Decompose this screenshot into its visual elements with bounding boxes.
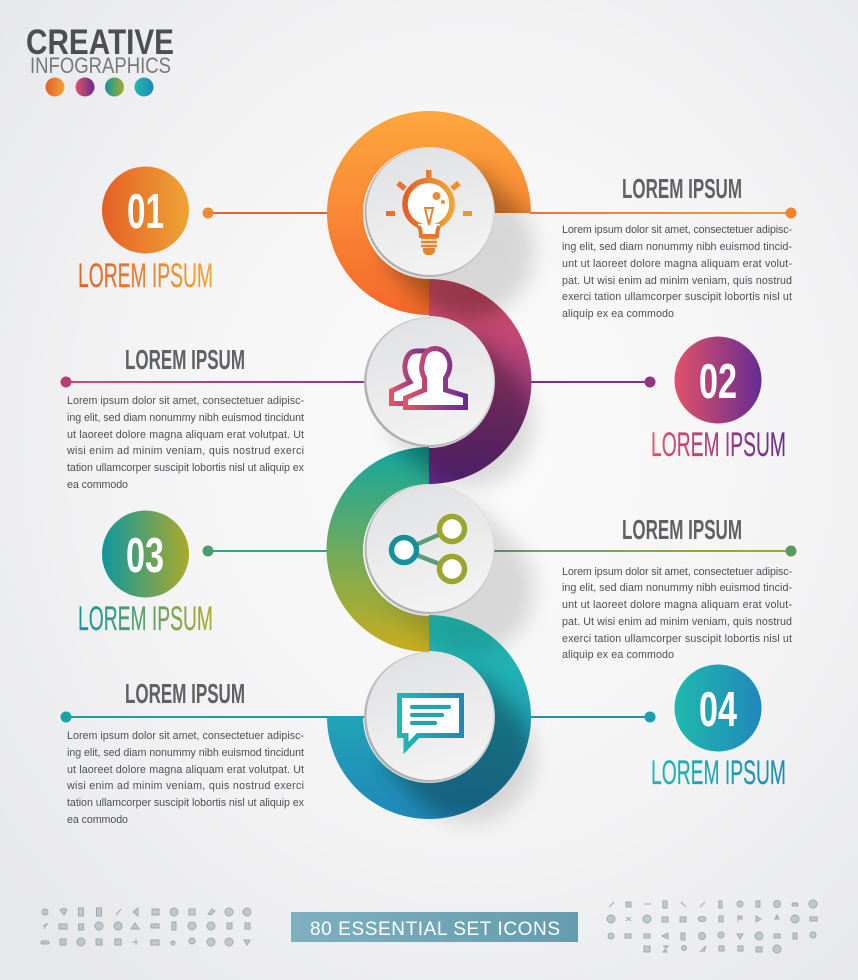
step 4 disc with chat icon — [364, 652, 494, 782]
icon set left — [41, 908, 251, 946]
number badge 03: 03 — [126, 529, 164, 583]
body 4: ea commodo — [67, 814, 128, 826]
body 1: Lorem ipsum dolor sit amet, consectetuer adipisc- — [562, 224, 792, 236]
number badge 02: 02 — [699, 355, 737, 409]
ribbon segment 1 orange — [327, 111, 531, 315]
text block 4 — [66, 678, 305, 826]
body 2: ut laoreet dolore magna aliquam erat volutpat. Ut — [67, 429, 304, 441]
body 1: pat. Ut wisi enim ad minim veniam, quis nostrud — [562, 275, 792, 287]
label 01: LOREM IPSUM — [78, 257, 213, 295]
ribbon segment 2 magenta — [429, 279, 531, 484]
body 4 — [66, 730, 305, 826]
body 2: ing elit, sed diam nonummy nibh euismod tincidunt — [67, 412, 304, 424]
heading 1: LOREM IPSUM — [622, 173, 742, 204]
body 2: Lorem ipsum dolor sit amet, consectetuer adipisc- — [67, 395, 304, 407]
logo subtitle: INFOGRAPHICS — [30, 53, 171, 78]
number badge 02 — [674, 336, 762, 424]
body 3: Lorem ipsum dolor sit amet, consectetuer adipisc- — [562, 566, 792, 578]
body 3 — [562, 566, 792, 661]
ribbon segment 4 teal — [327, 615, 531, 819]
body 4: ing elit, sed diam nonummy nibh euismod tincidunt — [67, 747, 304, 759]
body 4: wisi enim ad minim veniam, quis nostrud exerci — [66, 780, 304, 792]
body 2: tation ullamcorper suscipit lobortis nisl ut aliquip ex — [67, 462, 305, 474]
body 3: pat. Ut wisi enim ad minim veniam, quis nostrud — [562, 616, 792, 628]
body 1: aliquip ex ea commodo — [562, 308, 674, 320]
long shadows on background — [383, 166, 534, 822]
body 3: aliquip ex ea commodo — [562, 649, 674, 661]
body 1: ing elit, sed diam nonummy nibh euismod tincid- — [562, 241, 792, 253]
body 2: ea commodo — [67, 479, 128, 491]
body 3: ing elit, sed diam nonummy nibh euismod tincid- — [562, 582, 792, 594]
heading 3: LOREM IPSUM — [622, 514, 742, 545]
number badge 01: 01 — [127, 185, 164, 239]
body 4: Lorem ipsum dolor sit amet, consectetuer adipisc- — [67, 730, 304, 742]
body 1: exerci tation ullamcorper suscipit lobortis nisl ut — [562, 291, 792, 303]
connector lines — [60, 208, 796, 722]
icon: share — [392, 516, 464, 582]
number badge 04 — [674, 664, 762, 752]
ribbon: S-curve — [326, 111, 531, 819]
label 03: LOREM IPSUM — [78, 600, 213, 638]
step 1 disc with bulb icon — [364, 147, 494, 277]
banner: 80 ESSENTIAL SET ICONS — [310, 919, 560, 940]
logo dots — [46, 78, 154, 96]
body 2: wisi enim ad minim veniam, quis nostrud exerci — [66, 445, 304, 457]
text block 2 — [66, 344, 305, 491]
body 4: tation ullamcorper suscipit lobortis nisl ut aliquip ex — [67, 797, 305, 809]
number badge 01 — [102, 166, 189, 254]
text block 3 — [562, 514, 792, 661]
icon: users — [392, 348, 466, 408]
long shadows on ribbon — [383, 166, 534, 822]
body 2 — [66, 395, 305, 491]
heading 2: LOREM IPSUM — [125, 344, 245, 375]
body 4: ut laoreet dolore magna aliquam erat volutpat. Ut — [67, 764, 304, 776]
banner — [291, 912, 578, 942]
number badge 03 — [102, 510, 189, 598]
body 3: exerci tation ullamcorper suscipit lobortis nisl ut — [562, 633, 792, 645]
icon set right — [607, 900, 817, 953]
logo title: CREATIVE — [26, 23, 174, 62]
step 3 disc with share icon — [364, 484, 494, 614]
step 2 disc with users icon — [364, 317, 494, 447]
icon: chat bubble — [400, 696, 462, 748]
text block 1 — [562, 173, 792, 320]
body 3: unt ut laoreet dolore magna aliquam erat volut- — [562, 599, 792, 611]
logo — [26, 23, 174, 96]
icon: light bulb — [386, 170, 472, 255]
body 1 — [562, 224, 792, 320]
heading 4: LOREM IPSUM — [125, 678, 245, 709]
ribbon segment 3 green — [326, 447, 429, 652]
body 1: unt ut laoreet dolore magna aliquam erat volut- — [562, 258, 792, 270]
number badge 04: 04 — [699, 683, 737, 737]
